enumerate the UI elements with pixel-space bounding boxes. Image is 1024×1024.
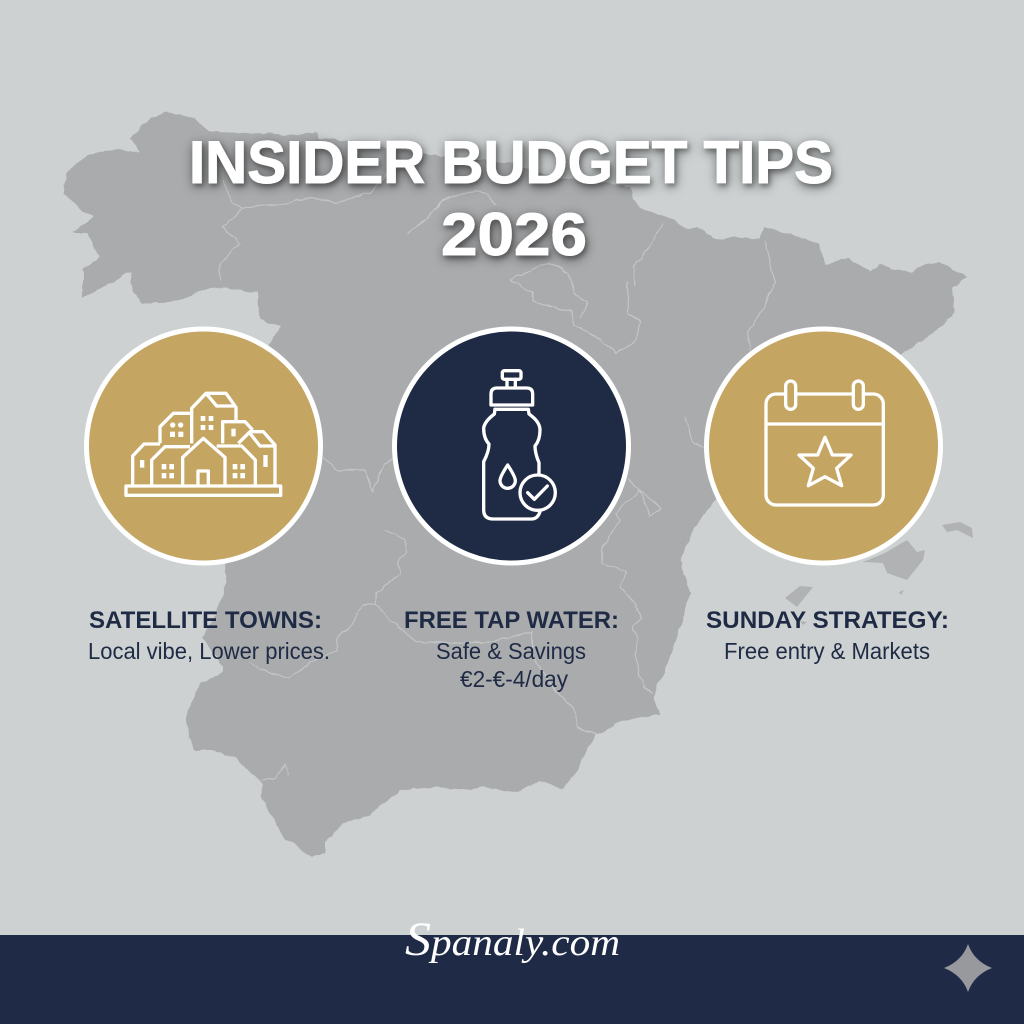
caption: sunday strategy heading: SUNDAY STRATEGY: [706,607,949,634]
balearic islands [785,522,973,625]
badge: gold circle [86,329,320,563]
caption: free tap water body: €2-€-4/day [460,666,568,692]
caption: satellite towns heading: SATELLITE TOWNS: [89,607,322,634]
footer bar [0,935,1024,1024]
badge: gold circle [706,329,940,563]
badge: navy circle [394,329,628,563]
caption: sunday strategy body: Free entry & Markets [724,638,930,664]
footer brand: Spanaly.com [405,913,620,966]
caption: free tap water body [436,638,586,692]
icon: calendar with star [766,381,883,505]
panel: free tap water [394,329,628,692]
panel: sunday strategy [706,329,949,664]
panel: satellite towns [86,329,330,664]
icon: town houses [126,393,281,495]
title line 2: 2026 [441,201,587,268]
caption: free tap water heading: FREE TAP WATER: [404,607,619,634]
regional borders [220,173,775,780]
icon: water bottle [484,371,555,519]
title [189,129,833,268]
caption: satellite towns body: Local vibe, Lower prices. [88,638,330,664]
title line 1: INSIDER BUDGET TIPS [189,129,833,196]
mainland silhouette [63,112,967,857]
icon: sparkle [944,944,992,992]
caption: free tap water body: Safe & Savings [436,638,586,664]
map of Spain [63,112,973,857]
